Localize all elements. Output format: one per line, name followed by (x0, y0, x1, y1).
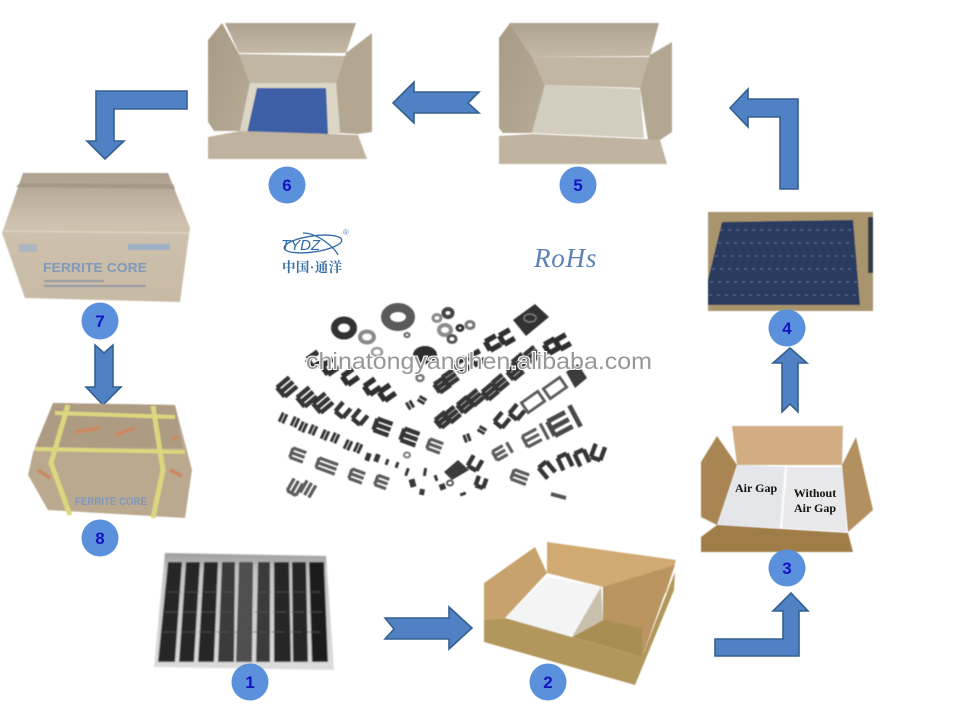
logo: TYDZ (281, 228, 349, 275)
carton text: FERRITE CORE (43, 260, 147, 275)
arrow: step 5 to step 6 (393, 82, 479, 123)
website watermark: chinatongyanghen.alibaba.com (306, 348, 652, 374)
photo 5: empty box with white liner (499, 23, 672, 164)
step badge 5: 5 (573, 176, 583, 195)
dark E cores upper (307, 330, 571, 401)
step badge 5 (560, 166, 596, 204)
photo 8: strapped carton (28, 403, 192, 518)
arrow: step 6 to step 7 (87, 91, 187, 159)
tray grid (709, 230, 859, 295)
step badge 1 (232, 664, 268, 700)
logo Chinese name: 中国·通洋 (282, 259, 343, 275)
step badge 7: 7 (95, 312, 105, 331)
logo letters: TYDZ (281, 237, 321, 254)
arrow: step 3 to step 4 (773, 348, 807, 412)
tray columns (158, 562, 328, 662)
lighter E and I core sets (287, 423, 549, 498)
photo 2: open box with white block (484, 542, 676, 685)
photo 7: sealed carton (2, 173, 190, 302)
step badge 1: 1 (245, 673, 255, 692)
step badge 3 (768, 550, 806, 586)
label: Without Air Gap: Without (794, 486, 836, 500)
arrow: step 2 to step 3 (715, 593, 808, 656)
logo registered mark: ® (343, 228, 349, 237)
step badge 7 (82, 302, 118, 340)
step badge 6: 6 (282, 176, 292, 195)
E cores second row (277, 377, 420, 445)
toroid rings (334, 308, 474, 486)
photo 6: box with blue tray inside (208, 23, 372, 159)
step badge 4: 4 (782, 319, 792, 338)
photo 4: tray of cores in box (708, 212, 873, 311)
carton text: FERRITE CORE (75, 496, 147, 508)
bar core (551, 494, 566, 498)
arrow: step 4 to step 5 (730, 89, 798, 189)
tray horizontal bands (163, 592, 325, 632)
ferrite core assortment (277, 304, 605, 498)
carton logo marks (128, 244, 170, 250)
label: Air Gap: Air Gap (735, 481, 777, 495)
arrow: step 7 to step 8 (86, 345, 121, 405)
step badge 6 (268, 166, 306, 204)
photo 3: box with Air Gap and Without Air Gap labels (701, 426, 873, 552)
step badge 8: 8 (95, 529, 105, 548)
small cores row (279, 396, 486, 495)
step badge 8 (82, 520, 118, 556)
step badge 3: 3 (782, 559, 792, 578)
solid disc core (413, 346, 437, 364)
RoHs mark: RoHs (533, 243, 597, 273)
rectangular frames (521, 377, 567, 413)
medium cores centre right (434, 347, 605, 488)
arrow: step 1 to step 2 (385, 607, 472, 649)
step badge 4 (768, 310, 806, 346)
logo orbit swoosh (283, 232, 343, 256)
step badge 2: 2 (543, 673, 553, 692)
large pot cores (444, 304, 587, 480)
label: Without Air Gap: Air Gap (794, 501, 836, 515)
step badge 2 (530, 664, 566, 700)
largest E core (546, 405, 581, 439)
photo 1: tray of ferrite cores (154, 553, 334, 670)
yellow straps (35, 405, 185, 518)
